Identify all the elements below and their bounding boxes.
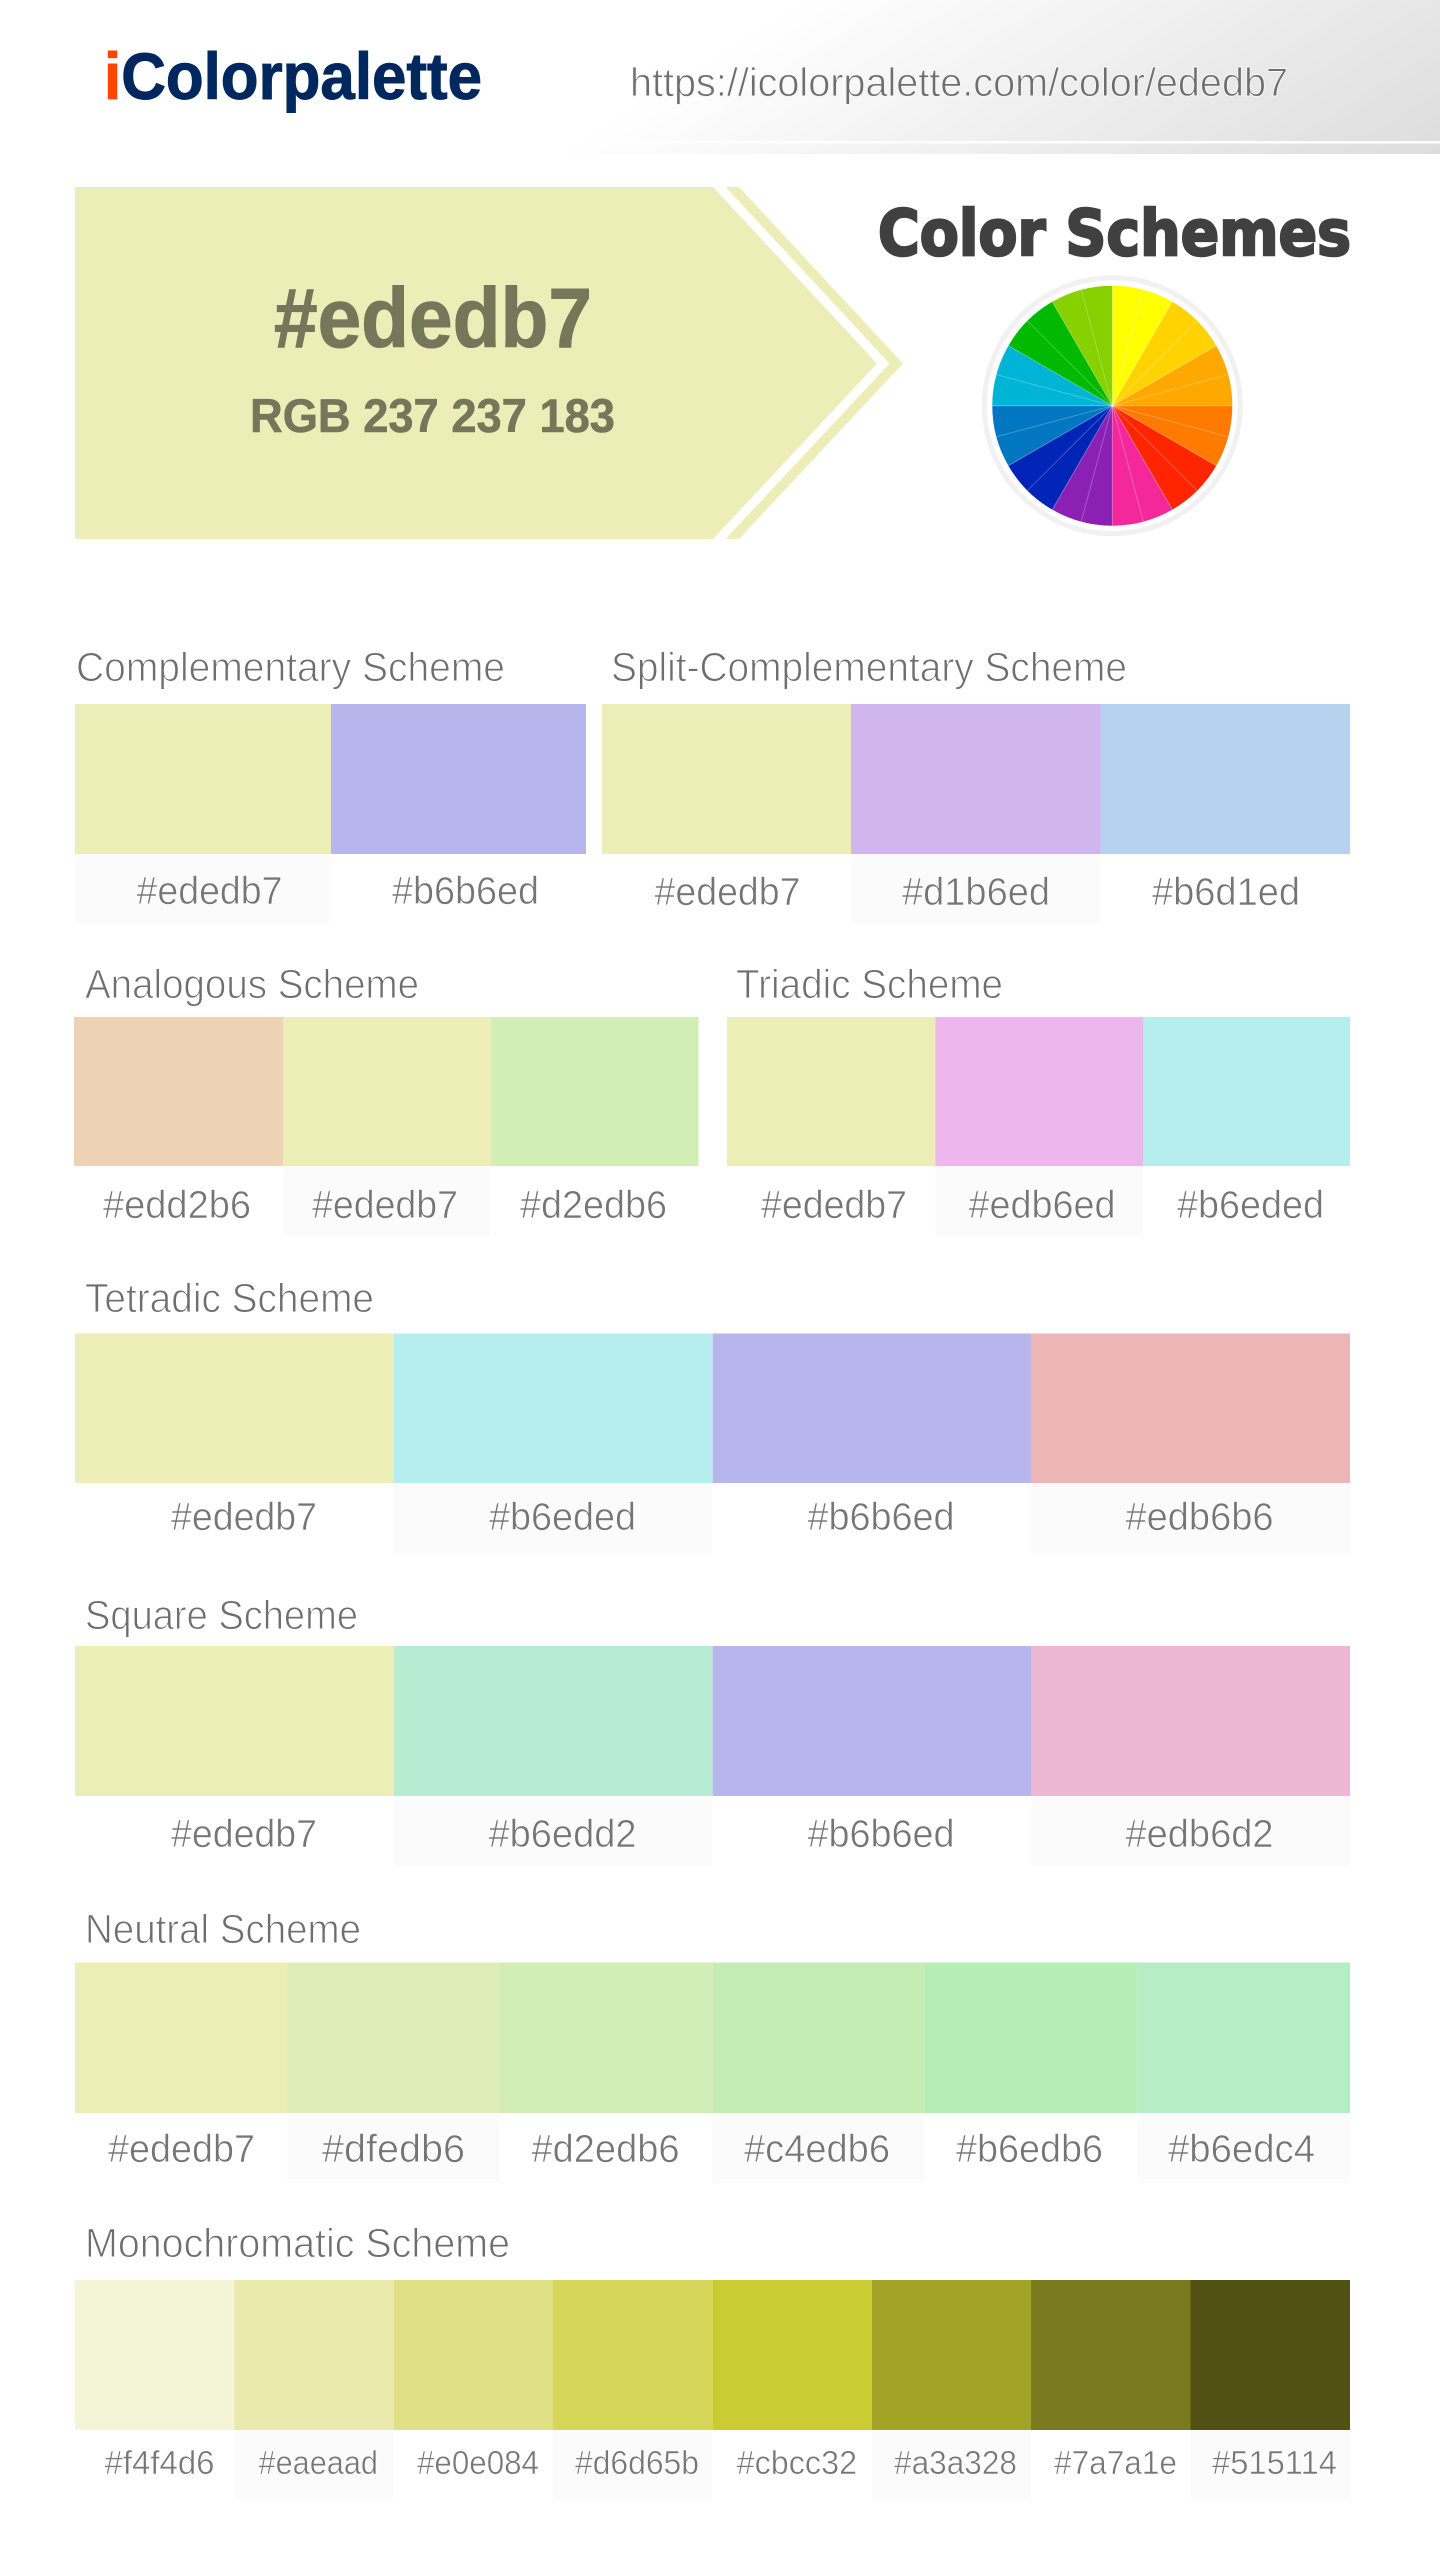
panel: monochromatic scheme: #e0e084 <box>417 2444 539 2481</box>
icon: color wheel <box>984 278 1240 534</box>
panel: monochromatic scheme: #a3a328 <box>894 2444 1017 2481</box>
panel: split-complementary scheme: #ededb7 <box>654 871 800 914</box>
panel: square scheme: #b6edd2 <box>488 1813 636 1856</box>
panel: analogous scheme <box>74 961 698 1236</box>
panel: triadic scheme: #ededb7 <box>761 1184 907 1227</box>
panel: complementary scheme: #b6b6ed <box>392 870 539 913</box>
panel: complementary scheme <box>75 644 586 924</box>
title: color schemes: Color Schemes <box>878 197 1351 270</box>
panel: complementary scheme: #ededb7 <box>136 870 282 913</box>
heading: Triadic Scheme <box>736 961 1003 1007</box>
heading: Square Scheme <box>85 1592 358 1638</box>
panel: neutral scheme: #b6edb6 <box>956 2128 1103 2171</box>
panel: neutral scheme: #c4edb6 <box>744 2128 890 2171</box>
panel: neutral scheme: #b6edc4 <box>1168 2128 1315 2171</box>
panel: tetradic scheme: #ededb7 <box>171 1496 317 1539</box>
panel: analogous scheme: #d2edb6 <box>520 1184 667 1227</box>
panel: tetradic scheme <box>75 1275 1350 1553</box>
panel: triadic scheme: #b6eded <box>1177 1184 1324 1227</box>
panel: analogous scheme: #ededb7 <box>312 1184 458 1227</box>
panel: triadic scheme: #edb6ed <box>968 1184 1116 1227</box>
panel: split-complementary scheme: #d1b6ed <box>902 871 1050 914</box>
heading: Monochromatic Scheme <box>85 2220 510 2266</box>
panel: monochromatic scheme <box>75 2220 1350 2499</box>
panel: monochromatic scheme: #cbcc32 <box>737 2444 857 2481</box>
panel: monochromatic scheme: #7a7a1e <box>1054 2444 1177 2481</box>
url: https://icolorpalette.com/color/ededb7 <box>630 61 1288 105</box>
panel: square scheme: #edb6d2 <box>1126 1813 1274 1856</box>
panel: tetradic scheme: #b6b6ed <box>808 1496 954 1539</box>
heading: Analogous Scheme <box>85 961 419 1007</box>
panel: monochromatic scheme: #eaeaad <box>258 2444 378 2481</box>
heading: Neutral Scheme <box>85 1906 361 1952</box>
panel: neutral scheme: #dfedb6 <box>322 2128 465 2171</box>
panel: neutral scheme <box>75 1906 1350 2183</box>
panel: neutral scheme: #d2edb6 <box>532 2128 680 2171</box>
heading: Complementary Scheme <box>76 644 505 690</box>
panel: monochromatic scheme: #d6d65b <box>575 2444 699 2481</box>
heading: Tetradic Scheme <box>85 1275 374 1321</box>
panel: split-complementary scheme <box>602 644 1350 924</box>
panel: tetradic scheme: #edb6b6 <box>1126 1496 1274 1539</box>
panel: monochromatic scheme: #515114 <box>1212 2444 1337 2481</box>
panel: analogous scheme: #edd2b6 <box>103 1184 251 1227</box>
hex value: #ededb7 <box>274 271 592 365</box>
heading: Split-Complementary Scheme <box>611 644 1127 690</box>
panel: square scheme: #ededb7 <box>171 1813 317 1856</box>
panel: triadic scheme <box>727 961 1350 1236</box>
panel: square scheme <box>75 1592 1350 1866</box>
panel: neutral scheme: #ededb7 <box>108 2128 255 2171</box>
panel: main color arrow <box>75 187 903 539</box>
panel: square scheme: #b6b6ed <box>808 1813 954 1856</box>
panel: monochromatic scheme: #f4f4d6 <box>104 2444 214 2481</box>
logo: iColorpalette <box>104 39 482 113</box>
rgb value: RGB 237 237 183 <box>250 389 615 442</box>
panel: split-complementary scheme: #b6d1ed <box>1152 871 1300 914</box>
header band <box>0 0 1440 154</box>
panel: tetradic scheme: #b6eded <box>489 1496 636 1539</box>
